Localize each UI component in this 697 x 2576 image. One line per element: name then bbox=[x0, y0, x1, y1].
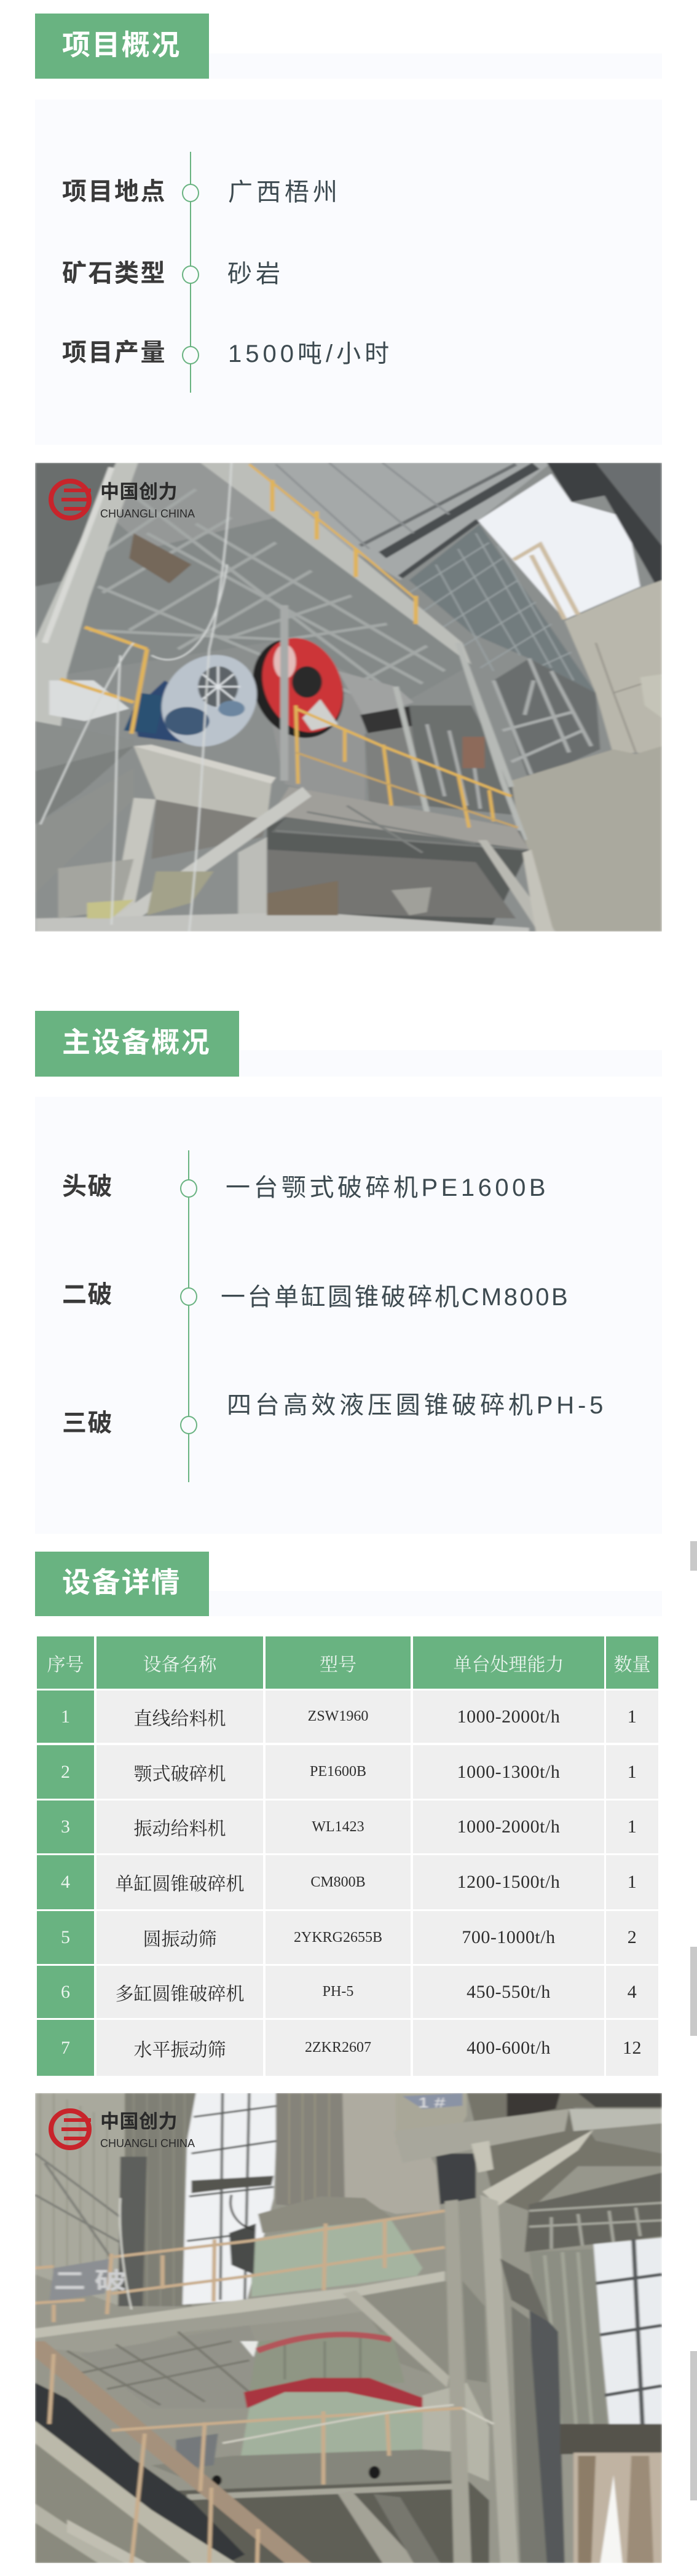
row 5: 圆振动筛 bbox=[143, 1930, 216, 1950]
table header row: 设备名称 bbox=[143, 1654, 216, 1675]
logo: Chuangli China on first photo bbox=[49, 479, 195, 520]
row 7: 7 bbox=[61, 2038, 70, 2057]
heading: main equipment overview bbox=[35, 1011, 239, 1077]
label: project location: 项目地点 bbox=[62, 178, 167, 205]
label: primary crushing: 头破 bbox=[62, 1173, 113, 1200]
scroll indicator 2 bbox=[690, 1947, 697, 2036]
value: tertiary crusher: 四台高效液压圆锥破碎机PH-5 bbox=[227, 1392, 607, 1419]
label: ore type: 矿石类型 bbox=[62, 260, 167, 287]
row 7: 水平振动筛 bbox=[134, 2040, 226, 2060]
row 7: 400-600t/h bbox=[467, 2038, 551, 2057]
label: secondary crushing: 二破 bbox=[62, 1281, 113, 1308]
section header band: project overview bbox=[35, 53, 662, 79]
logo: Chuangli China on second photo bbox=[49, 2108, 195, 2150]
label: tertiary crushing: 三破 bbox=[62, 1410, 113, 1437]
heading: project overview: 项目概况 bbox=[62, 29, 181, 61]
logo wordmark English: CHUANGLI CHINA bbox=[100, 2137, 195, 2150]
heading: project overview bbox=[35, 14, 209, 79]
row 2: 颚式破碎机 bbox=[134, 1764, 226, 1785]
row 2: 2 bbox=[61, 1761, 70, 1782]
timeline marker 1 bbox=[180, 1179, 197, 1198]
heading: main equipment overview: 主设备概况 bbox=[62, 1026, 211, 1058]
row 2: 1000-1300t/h bbox=[457, 1761, 560, 1782]
row 7: 2ZKR2607 bbox=[305, 2040, 371, 2056]
row 4: CM800B bbox=[310, 1874, 366, 1890]
timeline line bbox=[188, 1150, 189, 1482]
icon: red ring logo mark bbox=[49, 2108, 92, 2150]
row 5: 2YKRG2655B bbox=[294, 1930, 382, 1946]
photo: jaw crusher installation bbox=[35, 463, 662, 932]
row 3: 1000-2000t/h bbox=[457, 1816, 560, 1837]
row 1: 1 bbox=[628, 1706, 637, 1727]
row 1: 直线给料机 bbox=[134, 1708, 226, 1729]
row 6: 多缸圆锥破碎机 bbox=[116, 1984, 245, 2005]
row 6: 6 bbox=[61, 1981, 70, 2002]
row 1: ZSW1960 bbox=[308, 1708, 368, 1724]
row 4: 单缸圆锥破碎机 bbox=[116, 1874, 245, 1895]
row 2: 1 bbox=[628, 1761, 637, 1782]
photo: cone crusher installation: 1 # bbox=[418, 2095, 446, 2110]
row 4: 4 bbox=[61, 1872, 70, 1892]
row 1: 1000-2000t/h bbox=[457, 1706, 560, 1727]
row 3: 振动给料机 bbox=[134, 1819, 226, 1839]
table header row bbox=[37, 1636, 658, 1689]
heading: equipment details bbox=[35, 1552, 209, 1616]
timeline marker 3 bbox=[182, 346, 199, 364]
logo wordmark Chinese: 中国创力 bbox=[100, 481, 178, 503]
value: project output: 1500吨/小时 bbox=[228, 340, 393, 367]
value: ore type: 砂岩 bbox=[227, 261, 284, 288]
table: equipment list bbox=[37, 1636, 658, 2076]
timeline marker 2 bbox=[182, 265, 199, 284]
photo: cone crusher installation: 二 破 bbox=[53, 2268, 127, 2294]
logo wordmark Chinese: 中国创力 bbox=[100, 2111, 178, 2132]
row 5: 5 bbox=[61, 1927, 70, 1947]
timeline marker 1 bbox=[182, 184, 199, 202]
row 4 bbox=[37, 1855, 658, 1909]
logo wordmark English: CHUANGLI CHINA bbox=[100, 508, 195, 520]
row 7 bbox=[37, 2020, 658, 2076]
row 4: 1200-1500t/h bbox=[457, 1872, 560, 1892]
row 1 bbox=[37, 1690, 658, 1743]
section header band: equipment details bbox=[35, 1591, 662, 1616]
panel: main equipment overview bbox=[35, 1097, 662, 1534]
row 5 bbox=[37, 1911, 658, 1964]
row 6 bbox=[37, 1966, 658, 2018]
timeline marker 2 bbox=[180, 1287, 197, 1306]
row 4: 1 bbox=[628, 1872, 637, 1892]
value: secondary crusher: 一台单缸圆锥破碎机CM800B bbox=[221, 1284, 570, 1311]
table header row: 序号 bbox=[47, 1654, 84, 1675]
row 5: 2 bbox=[628, 1927, 637, 1947]
table header row: 型号 bbox=[320, 1654, 356, 1675]
scroll indicator 3 bbox=[690, 2351, 697, 2500]
row 1: 1 bbox=[61, 1706, 70, 1727]
timeline line bbox=[190, 152, 191, 393]
scroll indicator 1 bbox=[690, 1541, 697, 1571]
heading: equipment details: 设备详情 bbox=[62, 1566, 181, 1598]
row 3: 3 bbox=[61, 1816, 70, 1837]
icon: red ring logo mark bbox=[49, 479, 92, 520]
photo: cone crusher installation bbox=[35, 2093, 662, 2563]
row 2 bbox=[37, 1745, 658, 1799]
label: project output: 项目产量 bbox=[62, 339, 167, 366]
value: primary crusher: 一台颚式破碎机PE1600B bbox=[226, 1174, 549, 1201]
section header band: main equipment bbox=[35, 1050, 662, 1077]
table header row: 单台处理能力 bbox=[454, 1654, 564, 1675]
timeline marker 3 bbox=[180, 1416, 197, 1434]
row 2: PE1600B bbox=[310, 1764, 366, 1780]
row 5: 700-1000t/h bbox=[462, 1927, 556, 1947]
row 6: 450-550t/h bbox=[467, 1981, 551, 2002]
row 6: PH-5 bbox=[323, 1984, 353, 2000]
row 6: 4 bbox=[628, 1981, 637, 2002]
row 3: WL1423 bbox=[312, 1819, 364, 1835]
row 7: 12 bbox=[623, 2038, 642, 2057]
row 3: 1 bbox=[628, 1816, 637, 1837]
row 3 bbox=[37, 1800, 658, 1853]
table header row: 数量 bbox=[613, 1654, 650, 1675]
value: project location: 广西梧州 bbox=[228, 179, 341, 206]
panel: project overview bbox=[35, 100, 662, 445]
